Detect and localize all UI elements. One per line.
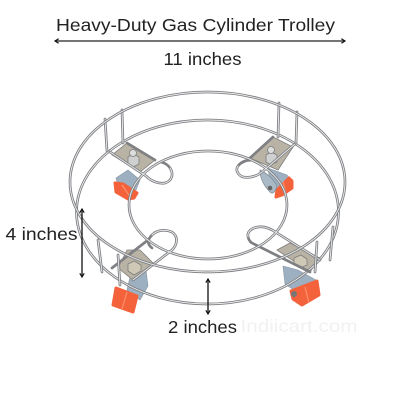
label: 2 inches: 2 inches — [168, 317, 237, 337]
upright posts — [98, 103, 333, 285]
label: 4 inches: 4 inches — [6, 224, 78, 244]
back left caster — [112, 143, 155, 199]
arrow: 11 inch width — [55, 40, 345, 42]
title: Heavy-Duty Gas Cylinder Trolley — [56, 15, 335, 35]
watermark: Indiicart.com — [240, 316, 358, 336]
inner ring with loops — [110, 137, 320, 280]
top ring — [70, 92, 345, 272]
front right caster — [277, 243, 320, 305]
arrow: 4 inch height — [81, 209, 83, 277]
bottom ring — [76, 120, 338, 304]
label: 11 inches: 11 inches — [164, 49, 242, 69]
back right caster — [250, 137, 293, 197]
trolley illustration — [70, 92, 345, 312]
arrow: 2 inch height — [207, 279, 209, 314]
front left caster — [113, 250, 153, 312]
